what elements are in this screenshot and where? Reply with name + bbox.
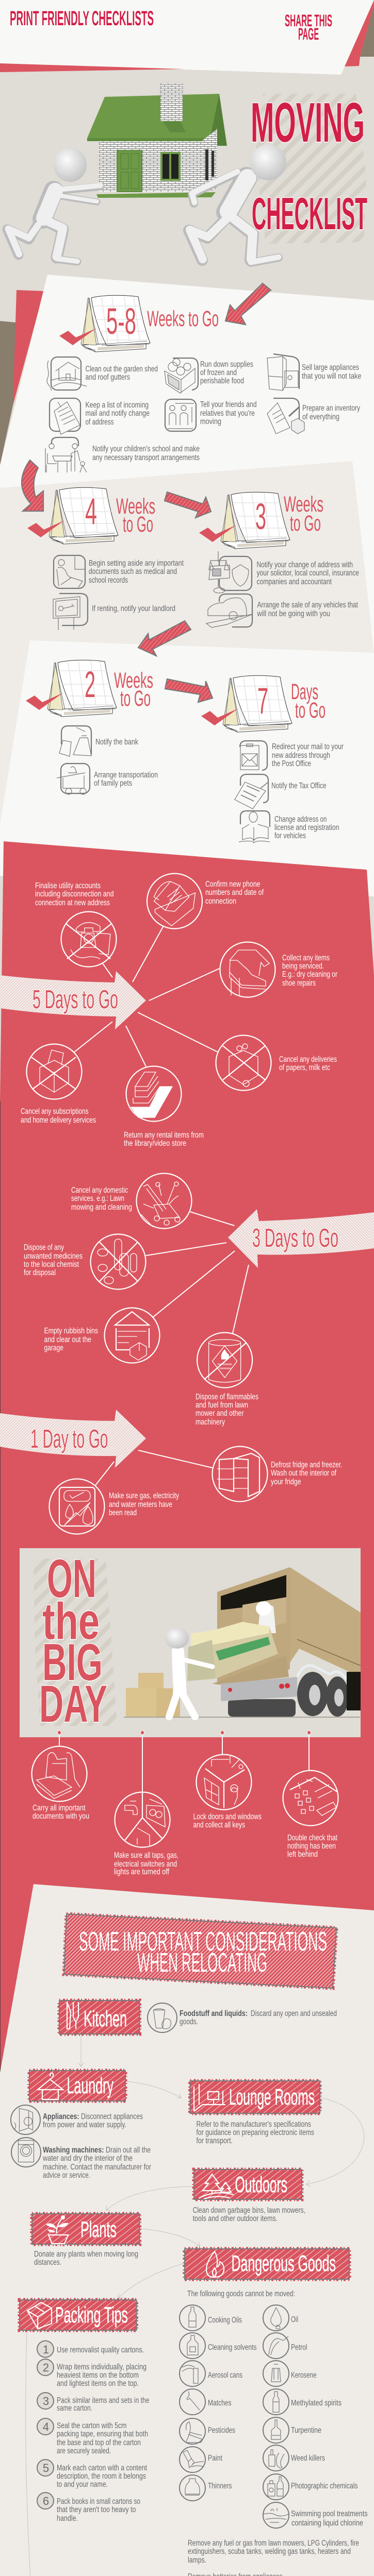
text: packing tips: Pack books in small cartons so (57, 2497, 140, 2506)
text: notify the bank: Notify the bank (95, 738, 138, 747)
text: arrange sale of vehicles (257, 601, 359, 618)
section: 3 weeks heading: to Go (290, 511, 321, 536)
text: cancel domestic services: services. e.g.: Lawn (71, 1194, 124, 1203)
list: packing tips numbers: 6 (43, 2495, 49, 2507)
text: dangerous goods labels: Petrol (291, 2343, 307, 2352)
text: donate plants (34, 2250, 138, 2267)
text: arrange transportation (94, 771, 158, 788)
text: make sure taps: lights are turned off (114, 1868, 170, 1876)
icon: taps and switches (115, 1792, 170, 1848)
text: packing tips: Use removalist quality cartons. (57, 2346, 144, 2354)
text: clean down: tools and other outdoor items. (193, 2214, 278, 2223)
icon: fax phone (147, 874, 202, 928)
text: finalise utility accounts: connection at new address (35, 899, 110, 907)
text: finalise utility accounts: Finalise utility accounts (35, 882, 101, 890)
text: return rentals (124, 1131, 204, 1148)
text: cancel domestic services: mowing and cleaning (71, 1203, 132, 1212)
text: dangerous goods labels: Methylated spirits (291, 2399, 342, 2408)
text: packing tips: are securely sealed. (57, 2447, 111, 2455)
title: considerations (79, 1927, 327, 1978)
icon: garden shed (47, 357, 87, 391)
icon: school table (45, 437, 87, 472)
text: packing tips: Pack similar items and sets in the (57, 2396, 150, 2405)
banner: plants (32, 2214, 139, 2244)
text: confirm new phone: numbers and date of (205, 888, 264, 897)
text: clean out the garden shed: Clean out the garden shed (86, 365, 158, 374)
text: packing tips: Mark each carton with a content (57, 2464, 148, 2472)
banner: laundry (29, 2071, 125, 2101)
text: make sure taps (114, 1851, 178, 1876)
text: clean out the garden shed (86, 365, 158, 382)
list: packing tips numbers: 5 (43, 2462, 49, 2475)
text: arrange sale of vehicles: will not be going with you (257, 609, 330, 618)
list: packing tips numbers: 1 (43, 2343, 49, 2356)
text: confirm new phone (205, 880, 264, 906)
icon: deliveries crossed out (216, 1036, 271, 1090)
text: carry all documents (32, 1804, 89, 1821)
icon: flammable barrel crossed out (197, 1332, 252, 1388)
text: begin setting aside: Begin setting aside any important (89, 559, 184, 568)
text: defrost fridge: your fridge (271, 1478, 301, 1486)
icon: clipboard list (50, 398, 80, 434)
decorative: left dark edge (0, 1101, 1, 2073)
text: clean down (193, 2206, 305, 2223)
text: finalise utility accounts (35, 882, 113, 907)
text: make sure taps: electrical switches and (114, 1860, 177, 1869)
text: double check: nothing has been (287, 1842, 336, 1851)
text: packing tips: same carton. (57, 2404, 92, 2413)
text: defrost fridge (271, 1461, 343, 1486)
icon: phone crossed out (61, 912, 117, 967)
panel: white panel two weeks (0, 640, 374, 896)
text: refer to manufacturer (196, 2120, 314, 2145)
text: collect any items (282, 954, 337, 988)
text: tell your friends (200, 400, 257, 426)
text: packing tips: the base and top of the carton (57, 2438, 141, 2447)
text: sell large appliances: Sell large appliances (302, 363, 359, 372)
text: dispose of medicines: Dispose of any (24, 1243, 64, 1252)
text: change address on license (274, 815, 339, 840)
text: redirect your mail: Redirect your mail to your (272, 742, 344, 751)
text: following goods: The following goods cannot be moved: (187, 2290, 295, 2298)
banner: outdoors: Outdoors (235, 2172, 287, 2197)
text: make sure gas (109, 1492, 179, 1517)
list: packing tips numbers: 4 (43, 2420, 49, 2433)
section: 4 weeks heading: 4 (85, 492, 97, 532)
text: foodstuff and liquids: goods. (180, 2018, 198, 2026)
arrow: 5 days to go: 5 Days to Go (32, 985, 118, 1014)
text: dangerous goods labels: Turpentine (291, 2426, 321, 2435)
text: washing machines (42, 2146, 151, 2180)
section: 2 weeks heading: Weeks (114, 668, 153, 693)
text: appliances: Appliances: (43, 2112, 79, 2121)
hero: left figure carrying house (7, 148, 101, 262)
icon: money bags (59, 726, 91, 756)
title: moving checklist (251, 91, 367, 239)
text: run down supplies (200, 360, 253, 385)
text: make sure gas: and water meters have (109, 1500, 172, 1509)
text: dangerous goods labels: Weed killers (291, 2454, 325, 2463)
hero: house illustration (87, 83, 227, 198)
text: run down supplies: of frozen and (200, 368, 237, 377)
arrow: to 2 weeks (138, 621, 191, 656)
text: change address on license: for vehicles (274, 832, 306, 840)
list: packing tips numbers: 2 (43, 2361, 49, 2374)
icon: open fridge (213, 1447, 267, 1501)
connector lines: 3 days (146, 1212, 249, 1333)
text: keep a list (86, 401, 150, 427)
text: dispose of medicines (24, 1243, 83, 1277)
text: dangerous goods labels: Thinners (208, 2482, 232, 2490)
hero: right figure carrying house (189, 144, 286, 263)
text: dangerous goods labels: Cooking Oils (208, 2316, 242, 2325)
banner: kitchen: Kitchen (84, 2006, 127, 2031)
icon: envelope on clipboard (240, 741, 267, 770)
text: keep a list: Keep a list of incoming (86, 401, 149, 410)
icon: pet in cart (57, 764, 90, 794)
icon: friends (165, 399, 196, 431)
text: keep a list: mail and notify change (86, 409, 150, 418)
text: foodstuff and liquids (180, 2009, 337, 2026)
text: make sure gas: been read (109, 1509, 137, 1517)
text: dangerous goods labels (208, 2315, 368, 2528)
text: foodstuff and liquids: Foodstuff and liquids: (180, 2009, 248, 2018)
text: refer to manufacturer: for guidance on preparing electronic items (196, 2128, 314, 2137)
text: packing tips: heaviest items on the bottom (57, 2371, 139, 2380)
text: packing tips: Seal the carton with 5cm (57, 2421, 127, 2430)
text: washing machines: machine. Contact the manufacturer for (43, 2163, 151, 2172)
title: on the big day: ON (47, 1549, 96, 1609)
icon: meters (50, 1479, 104, 1534)
dotted flow arrows (26, 2036, 364, 2576)
text: if renting: If renting, notify your landlord (92, 604, 175, 613)
text: packing tips: description, the room it belongs (57, 2472, 146, 2481)
text: collect any items: E.g.: dry cleaning or (282, 970, 337, 979)
text: remove fuel and batteries: lamps. (188, 2556, 206, 2565)
text: dispose of flammables: and fuel from lawn (196, 1401, 248, 1410)
text: double check (287, 1834, 338, 1859)
backdrop: panel edges (0, 275, 374, 876)
icon: key on easel (53, 594, 88, 630)
text: cancel subscriptions (21, 1107, 96, 1125)
text: refer to manufacturer: for transport. (196, 2137, 233, 2145)
text: begin setting aside: documents such as medical and (89, 567, 177, 576)
icon: books and video (126, 1066, 182, 1121)
icon: shirt and shoe (220, 942, 275, 997)
text: notify school: Notify your children's school and make (92, 445, 200, 453)
icon: calculator (235, 774, 268, 809)
section: 2 weeks heading: 2 (85, 665, 95, 705)
text: carry all documents: documents with you (32, 1812, 89, 1821)
text: dispose of flammables (196, 1393, 258, 1427)
icon: lawn mower (136, 1174, 192, 1228)
panel: header (0, 0, 374, 75)
section: 4 weeks heading (27, 487, 155, 544)
text: donate plants: distances. (34, 2258, 61, 2267)
panel: considerations background (0, 1884, 374, 2576)
text: appliances (43, 2112, 143, 2129)
section: 7 days heading: to Go (295, 698, 326, 723)
text: empty rubbish bins (44, 1327, 98, 1352)
section: 7 days heading (201, 675, 326, 732)
text: tell your friends: Tell your friends and (200, 400, 257, 409)
text: packing tips (57, 2346, 150, 2523)
arrow: 1 day to go (0, 1410, 146, 1468)
text: dangerous goods labels: Pesticides (208, 2426, 235, 2435)
illustration: truck and removalists (124, 1567, 361, 1717)
icon: garage (104, 1308, 160, 1363)
text: finalise utility accounts: including disconnection and (35, 890, 113, 899)
text: notify school: any necessary transport arrangements (92, 453, 200, 462)
arrow: 1 day to go: 1 Day to Go (30, 1424, 108, 1453)
section: 3 weeks heading: Weeks (284, 492, 323, 517)
text: donate plants: Donate any plants when moving long (34, 2250, 138, 2259)
section: 4 weeks heading: to Go (123, 512, 153, 537)
section: 2 weeks heading: to Go (120, 686, 151, 711)
connector pins: big day (58, 1731, 311, 1792)
text: keep a list: of address (86, 418, 114, 427)
text: collect any items: shoe repairs (282, 979, 316, 988)
banner: packing tips: Packing Tips (55, 2302, 128, 2328)
icons: dangerous goods (180, 2305, 289, 2528)
text: redirect your mail: the Post Office (272, 759, 311, 768)
icon: fridge and washer (267, 354, 299, 391)
text: dispose of flammables: Dispose of flammables (196, 1393, 258, 1401)
banner: packing tips (20, 2300, 136, 2330)
text: packing tips: to and your name. (57, 2480, 108, 2489)
text: dangerous goods labels: Oil (291, 2315, 298, 2324)
text: notify school (92, 445, 200, 462)
text: dangerous goods labels: Paint (208, 2454, 223, 2463)
text: foodstuff and liquids: Discard any open and unsealed (251, 2009, 337, 2018)
arrow: to 4 weeks (22, 460, 43, 511)
icon: bag and documents (32, 1747, 87, 1801)
text: dangerous goods labels: Cleaning solvents (208, 2343, 257, 2352)
icon: washing machine (11, 2138, 41, 2167)
text: double check: left behind (287, 1850, 318, 1859)
text: double check: Double check that (287, 1834, 338, 1842)
text: cancel domestic services: Cancel any domestic (71, 1186, 128, 1195)
text: redirect your mail (272, 742, 344, 768)
banner: kitchen (59, 2001, 139, 2034)
section: 5-8 weeks heading: Weeks to Go (147, 307, 219, 331)
text: dangerous goods labels: Photographic chemicals (291, 2482, 358, 2490)
text: washing machines: Drain out all the (106, 2146, 151, 2155)
text: cancel subscriptions: and home delivery services (21, 1116, 96, 1125)
icon: glass and apple (148, 2003, 177, 2032)
text: confirm new phone: connection (205, 897, 236, 906)
text: packing tips: Wrap items individually, placing (57, 2363, 147, 2371)
panel: red checklist section (0, 841, 374, 2073)
text: dispose of medicines: for disposal (24, 1268, 56, 1277)
text: sell large appliances: that you will not take (302, 372, 361, 381)
section: 5-8 weeks heading: 5-8 (106, 301, 136, 342)
list: packing tips numbers (37, 2341, 54, 2509)
icon: pills crossed out (91, 1234, 145, 1289)
text: notify your change of address (257, 561, 359, 586)
text: confirm new phone: Confirm new phone (205, 880, 260, 889)
title: on the big day (39, 1549, 107, 1733)
text: packing tips: and lightest items on the top. (57, 2379, 139, 2388)
text: lock doors (193, 1812, 262, 1829)
title: on the big day: the (42, 1592, 100, 1650)
title: on the big day: DAY (39, 1675, 107, 1733)
text: tell your friends: moving (200, 417, 221, 426)
text: sell large appliances (302, 363, 361, 381)
text: appliances: from power and water supply. (43, 2121, 126, 2129)
text: begin setting aside (89, 559, 184, 585)
text: cancel any deliveries: of papers, milk etc (279, 1063, 330, 1072)
text: washing machines: Washing machines: (43, 2146, 104, 2155)
panel: on the big day (20, 1548, 361, 1737)
text: lock doors: and collect all keys (193, 1821, 245, 1829)
text: collect any items: Collect any items (282, 954, 330, 962)
text: arrange transportation: Arrange transportation (94, 771, 158, 779)
section: 5-8 weeks heading (59, 295, 219, 352)
section: 7 days heading: 7 (257, 681, 268, 722)
text: refer to manufacturer: Refer to the manufacturer's specifications (196, 2120, 311, 2129)
text: run down supplies: Run down supplies (200, 360, 253, 369)
icon: box of food (165, 358, 198, 393)
arrow: 2 weeks to 7 days (165, 679, 213, 702)
section: 4 weeks heading: Weeks (116, 494, 155, 519)
text: dangerous goods labels: Kerosene (291, 2371, 317, 2380)
text: washing machines: water and dry the interior of the (42, 2154, 133, 2163)
arrow: 5 days to go (0, 971, 146, 1029)
text: make sure gas: Make sure gas, electricity (109, 1492, 179, 1500)
text: dispose of medicines: unwanted medicines (24, 1252, 83, 1261)
text: notify the tax office: Notify the Tax Office (271, 782, 326, 790)
text: dispose of medicines: to the local chemist (24, 1260, 79, 1269)
text: empty rubbish bins: garage (44, 1344, 63, 1352)
text: packing tips: handle. (57, 2514, 78, 2523)
text: carry all documents: Carry all important (32, 1804, 86, 1812)
banner: plants: Plants (80, 2217, 117, 2242)
text: packing tips: packing tape, ensuring that both (57, 2430, 148, 2438)
icon: person with documents (54, 555, 85, 588)
arrow: 4 to 3 weeks (165, 492, 211, 518)
text: empty rubbish bins: Empty rubbish bins (44, 1327, 98, 1335)
icon: appliance (11, 2105, 40, 2134)
hero: hatch behind title (255, 94, 366, 244)
text: empty rubbish bins: and clear out the (44, 1335, 91, 1344)
section: 2 weeks heading (26, 660, 153, 717)
text: dangerous goods labels: Aerosol cans (208, 2371, 242, 2380)
text: change address on license: Change address on (274, 815, 327, 824)
banner: dangerous goods (185, 2249, 349, 2279)
link: share this page (285, 11, 332, 43)
text: appliances: Disconnect appliances (81, 2112, 143, 2121)
text: washing machines: advice or service. (43, 2171, 90, 2180)
section: 3 weeks heading (199, 492, 323, 549)
arrow: into 5-8 weeks (225, 283, 271, 325)
icon: scales and shield (209, 551, 252, 593)
panel: header: PRINT FRIENDLY CHECKLISTS (10, 7, 154, 30)
icon: doors windows keys (196, 1755, 252, 1809)
section: 7 days heading: Days (291, 680, 318, 704)
text: defrost fridge: Wash out the interior of (271, 1469, 337, 1478)
text: lock doors: Lock doors and windows (193, 1812, 262, 1821)
text: packing tips: that they aren't too heavy to (57, 2505, 136, 2514)
link: share this page: PAGE (298, 25, 319, 43)
text: tell your friends: relatives that you're (200, 409, 255, 418)
icon: checklist and pencil (283, 1770, 338, 1826)
text: prepare an inventory: of everything (302, 413, 339, 421)
text: collect any items: being serviced. (282, 962, 324, 971)
icon: car (206, 594, 253, 628)
banner: outdoors (194, 2170, 302, 2199)
text: clean out the garden shed: and roof gutters (86, 373, 130, 382)
text: redirect your mail: new address through (272, 751, 330, 760)
text: clean down: Clean down garbage bins, lawn mowers, (193, 2206, 305, 2215)
icon: person reading (239, 811, 270, 843)
title: on the big day: BIG (42, 1634, 103, 1691)
text: return rentals: Return any rental items from (124, 1131, 204, 1140)
text: change address on license: license and registration (274, 823, 339, 832)
text: cancel any deliveries (279, 1055, 337, 1072)
section: 3 weeks heading: 3 (255, 497, 266, 537)
text: dangerous goods labels: Matches (208, 2399, 232, 2408)
text: begin setting aside: school records (89, 576, 128, 585)
connector lines: 1 day (95, 1450, 213, 1485)
text: cancel domestic services (71, 1186, 132, 1212)
banner: laundry: Laundry (67, 2073, 113, 2098)
text: remove fuel and batteries (188, 2539, 359, 2576)
text: dispose of flammables: machinery (196, 1418, 225, 1427)
text: make sure taps: Make sure all taps, gas, (114, 1851, 178, 1860)
text: arrange transportation: of family pets (94, 779, 132, 788)
list: packing tips numbers: 3 (43, 2395, 49, 2408)
text: cancel subscriptions: Cancel any subscriptions (21, 1107, 89, 1116)
text: cancel any deliveries: Cancel any deliveries (279, 1055, 337, 1064)
text: prepare an inventory (302, 404, 360, 421)
icon: subscriptions crossed out (27, 1044, 82, 1099)
connector lines: 5 days (74, 926, 219, 1066)
arrow: 3 days to go (228, 1209, 374, 1268)
text: defrost fridge: Defrost fridge and freezer. (271, 1461, 343, 1469)
text: return rentals: the library/video store (124, 1139, 186, 1148)
banner: lounge rooms (190, 2081, 320, 2113)
text: dispose of flammables: mower and other (196, 1409, 243, 1418)
banner: some important considerations (64, 1914, 336, 1988)
text: notify your change of address: companies and accountant (257, 578, 332, 586)
icon: inventory (267, 398, 304, 434)
text: run down supplies: perishable food (200, 377, 244, 385)
